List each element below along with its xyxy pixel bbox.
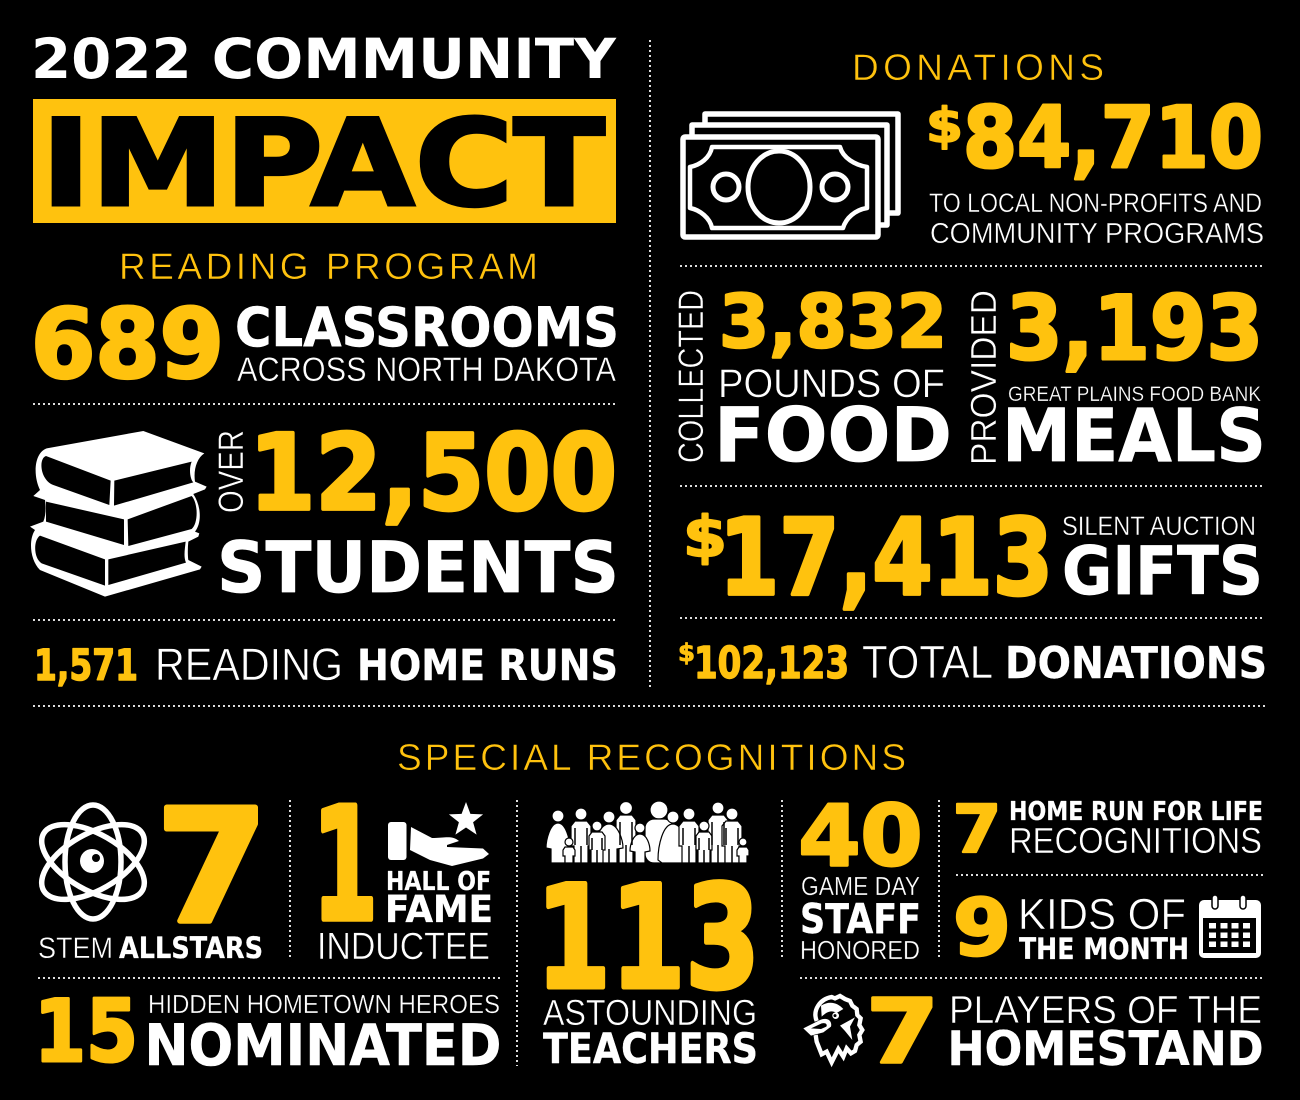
icon: bird mascot <box>803 996 862 1062</box>
stat: 9 kids of the month: KIDS OF <box>1018 890 1186 939</box>
stat: 40 game day staff honored: STAFF <box>800 895 921 943</box>
stat: 40 game day staff honored: 40 <box>798 787 922 885</box>
stat: $102,123 total donations: 102,123 <box>694 638 849 689</box>
stat: 15 hidden hometown heroes nominated: NOMINATED <box>144 1013 502 1079</box>
stat: 1 hall of fame inductee: FAME <box>385 888 493 931</box>
stat: 1 hall of fame inductee: HALL OF <box>386 867 491 897</box>
icon: atom <box>30 805 156 919</box>
stat: $17,413 silent auction gifts: $ <box>683 505 727 570</box>
stat: over 12,500 students: OVER <box>212 430 251 513</box>
stat: $17,413 silent auction gifts: SILENT AUCTION <box>1062 511 1256 541</box>
stat: 689 classrooms: ACROSS NORTH DAKOTA <box>237 351 616 389</box>
stat: collected 3,832 pounds of food <box>672 280 952 479</box>
icon: hand holding star <box>388 802 489 866</box>
stat: 7 players of the homestand: PLAYERS OF THE <box>949 989 1262 1032</box>
stat: $84,710: COMMUNITY PROGRAMS <box>930 218 1264 250</box>
stat: 7 players of the homestand: HOMESTAND <box>948 1022 1264 1077</box>
stat: 689 classrooms: CLASSROOMS <box>235 296 619 359</box>
title: 2022 community: 2022 COMMUNITY <box>31 27 617 91</box>
stat: $17,413 silent auction gifts: GIFTS <box>1062 532 1263 610</box>
stat: 689 classrooms: 689 <box>31 290 224 400</box>
stat: $84,710: 84,710 <box>963 89 1263 188</box>
stat: 40 game day staff honored <box>798 787 922 965</box>
stat: 113 astounding teachers: 113 <box>536 856 760 1021</box>
stat: 15 hidden hometown heroes nominated: 15 <box>34 982 138 1082</box>
stat: 7 home run for life recognitions: RECOGNITIONS <box>1009 820 1262 861</box>
stat: 7 players of the homestand: 7 <box>866 980 939 1083</box>
icon: calendar <box>1199 895 1261 958</box>
stat: 7 stem allstars <box>38 776 268 965</box>
stat: $17,413 silent auction gifts <box>683 497 1263 619</box>
stat: 1,571 reading home runs: 1,571 <box>34 641 138 691</box>
stat: 7 stem allstars: ALLSTARS <box>119 931 263 965</box>
stat: 40 game day staff honored: GAME DAY <box>801 871 920 901</box>
stat: collected 3,832 pounds of food: COLLECTED <box>672 290 711 463</box>
stat: provided 3,193 meals: MEALS <box>1002 394 1266 479</box>
stat: $84,710: $ <box>926 98 963 154</box>
stat: 689 classrooms <box>31 290 619 400</box>
panel: reading program <box>30 246 619 691</box>
stat: provided 3,193 meals: PROVIDED <box>963 290 1004 465</box>
stat: over 12,500 students <box>212 412 619 609</box>
stat: 7 home run for life recognitions: HOME RUN FOR LIFE <box>1009 797 1263 827</box>
stat: 40 game day staff honored: HONORED <box>800 935 920 965</box>
stat: $102,123 total donations <box>678 636 1267 689</box>
stat: 113 astounding teachers: ASTOUNDING <box>543 992 757 1033</box>
stat: 1 hall of fame inductee: 1 <box>312 774 378 956</box>
stat: 9 kids of the month <box>953 884 1189 974</box>
heading: reading program: READING PROGRAM <box>119 246 538 287</box>
title banner: impact: IMPACT <box>41 95 605 234</box>
stat: 15 hidden hometown heroes nominated: HIDDEN HOMETOWN HEROES <box>148 989 500 1019</box>
stat: provided 3,193 meals: 3,193 <box>1006 277 1263 380</box>
stat: 113 astounding teachers <box>536 856 760 1073</box>
stat: collected 3,832 pounds of food: POUNDS OF <box>718 362 945 406</box>
stat: 1,571 reading home runs: READING <box>155 639 343 690</box>
icon: stack of books <box>30 431 207 597</box>
stat: 113 astounding teachers: TEACHERS <box>543 1024 758 1073</box>
icon: crowd of teachers <box>546 801 749 863</box>
stat: 7 home run for life recognitions <box>952 791 1263 868</box>
stat: $102,123 total donations: TOTAL <box>862 636 993 688</box>
stat: provided 3,193 meals: GREAT PLAINS FOOD BANK <box>1008 383 1261 406</box>
stat: provided 3,193 meals <box>963 277 1266 479</box>
heading: special recognitions: SPECIAL RECOGNITIONS <box>397 737 906 778</box>
stat: $84,710 <box>926 89 1264 250</box>
stat: 7 home run for life recognitions: 7 <box>952 791 1002 868</box>
stat: collected 3,832 pounds of food: 3,832 <box>719 280 947 365</box>
stat: 1 hall of fame inductee <box>312 774 493 968</box>
stat: 7 stem allstars: 7 <box>156 776 268 958</box>
stat: 7 players of the homestand <box>866 980 1264 1083</box>
stat: collected 3,832 pounds of food: FOOD <box>714 391 952 479</box>
stat: $17,413 silent auction gifts: 17,413 <box>719 497 1053 619</box>
stat: 15 hidden hometown heroes nominated <box>34 982 502 1082</box>
heading: donations: DONATIONS <box>852 47 1104 88</box>
stat: $102,123 total donations: $ <box>678 639 695 667</box>
stat: 1,571 reading home runs: HOME RUNS <box>357 641 618 691</box>
stat: 9 kids of the month: 9 <box>953 884 1011 974</box>
stat: 1 hall of fame inductee: INDUCTEE <box>317 926 490 968</box>
icon: stack of bills <box>683 114 898 237</box>
stat: 1,571 reading home runs <box>34 639 618 691</box>
panel: donations <box>672 47 1267 689</box>
stat: 9 kids of the month: THE MONTH <box>1019 932 1189 966</box>
stat: $102,123 total donations: DONATIONS <box>1005 638 1267 689</box>
stat: over 12,500 students: 12,500 <box>249 412 617 534</box>
stat: over 12,500 students: STUDENTS <box>217 527 619 609</box>
stat: 7 stem allstars: STEM <box>38 932 113 965</box>
